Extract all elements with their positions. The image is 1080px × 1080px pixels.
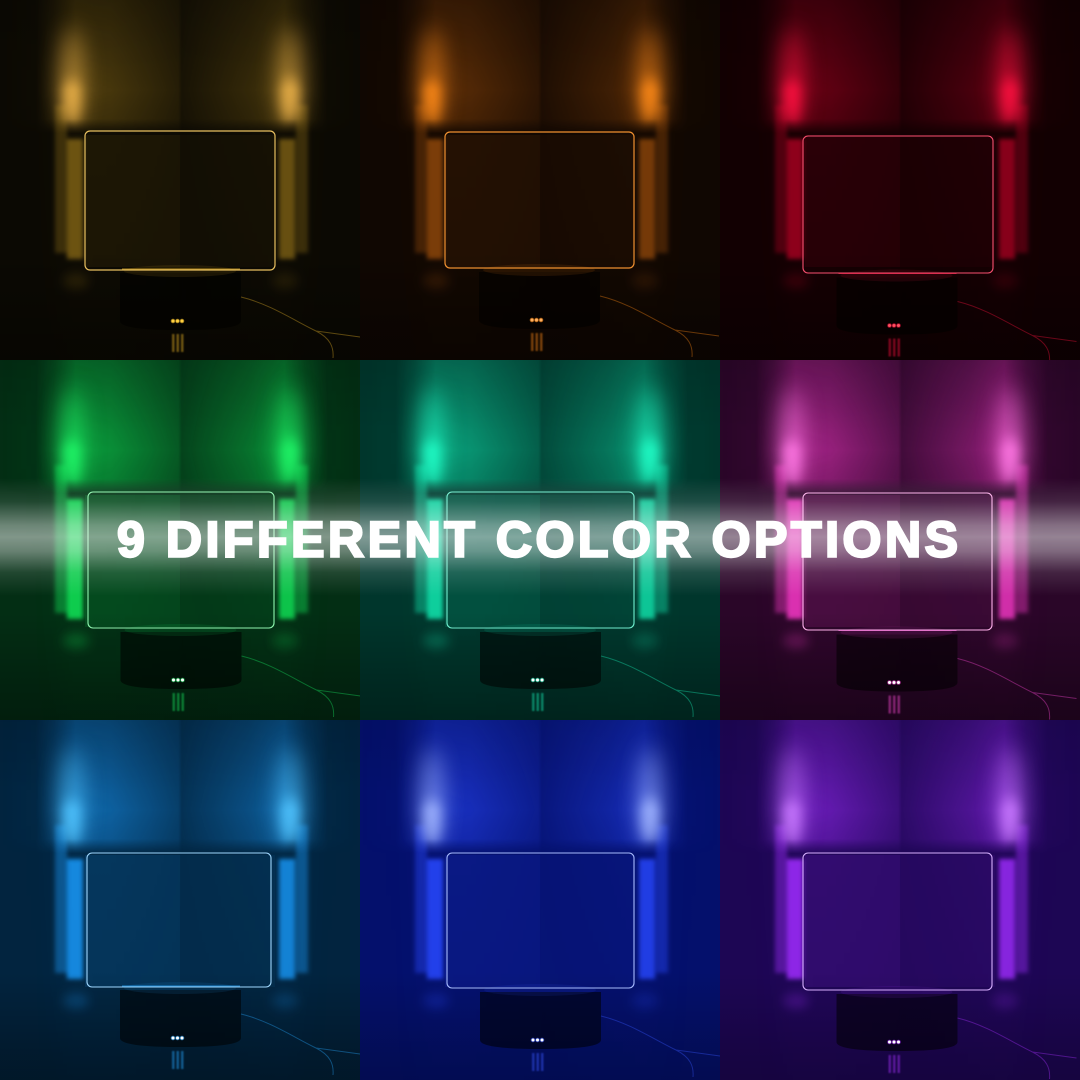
panel: green	[0, 360, 360, 720]
orange lamp frame	[445, 132, 634, 268]
green lamp frame	[88, 492, 274, 628]
yellow glow hot spots	[45, 20, 317, 131]
green lamp base	[120, 624, 360, 717]
panel: purple	[720, 720, 1080, 1080]
green glow hot spots	[46, 382, 316, 490]
panel: magenta	[720, 360, 1080, 720]
deep blue glow hot spots	[406, 742, 676, 850]
panel: sky blue	[0, 720, 360, 1080]
sky blue lamp frame	[87, 853, 271, 987]
purple lamp frame	[803, 853, 992, 990]
deep blue lamp frame	[447, 853, 634, 988]
teal glow hot spots	[406, 382, 676, 490]
title: 9 DIFFERENT COLOR OPTIONS	[117, 512, 958, 568]
red lamp frame	[803, 136, 993, 273]
magenta glow hot spots	[766, 382, 1036, 490]
deep blue lamp base	[480, 984, 720, 1077]
panel: orange	[360, 0, 720, 360]
orange glow hot spots	[405, 20, 677, 131]
panel: yellow	[0, 0, 360, 360]
magenta lamp frame	[803, 493, 992, 630]
sky blue glow hot spots	[46, 742, 316, 850]
translucent white band	[0, 478, 1080, 596]
yellow lamp frame	[85, 131, 275, 270]
magenta lamp base	[836, 626, 1076, 720]
teal lamp base	[480, 624, 720, 717]
red lamp base	[836, 270, 1076, 362]
teal lamp frame	[447, 492, 634, 628]
purple lamp base	[836, 986, 1076, 1079]
yellow lamp base	[120, 265, 360, 358]
panel: teal	[360, 360, 720, 720]
sky blue lamp base	[120, 982, 360, 1075]
panel: deep blue	[360, 720, 720, 1080]
orange lamp base	[479, 264, 719, 357]
purple glow hot spots	[766, 742, 1036, 850]
panel: red	[720, 0, 1080, 362]
red glow hot spots	[765, 20, 1037, 131]
